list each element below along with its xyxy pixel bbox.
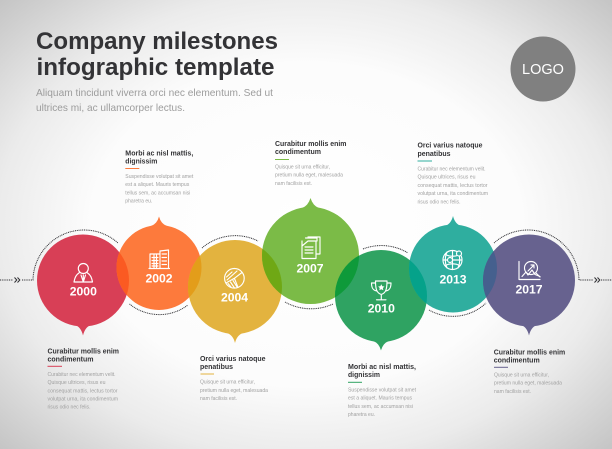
year 2017: 2017 bbox=[515, 282, 543, 296]
text block: 2000: Curabitur nec elementum velit. bbox=[48, 372, 116, 378]
text block: 2000: consequat mattis, lectus tortor bbox=[48, 388, 118, 394]
text block: 2007: pretium nulla eget, malesuada bbox=[275, 173, 343, 179]
year 2010: 2010 bbox=[368, 302, 395, 316]
subtitle: Aliquam tincidunt viverra orci nec elementum. Sed ut bbox=[36, 88, 273, 99]
text block: 2007: nam facilisis est. bbox=[275, 181, 312, 187]
text block: 2002 bbox=[125, 148, 194, 205]
milestone 2013 circle bbox=[409, 216, 497, 312]
text block: 2010: dignissim bbox=[348, 370, 380, 379]
icon: chart with magnifier bbox=[519, 262, 540, 280]
text block: 2002: Morbi ac nisl mattis, bbox=[125, 148, 193, 158]
title bbox=[36, 28, 278, 81]
text block: 2007: condimentum bbox=[275, 147, 321, 156]
text block: 2004: nam facilisis est. bbox=[200, 396, 237, 402]
text block: 2017: Curabitur mollis enim bbox=[494, 348, 566, 356]
logo: LOGO bbox=[522, 62, 564, 78]
icon: person bbox=[74, 264, 92, 282]
text block: 2002: Suspendisse volutpat sit amet bbox=[125, 174, 194, 180]
text block: 2010: pharetra eu. bbox=[348, 412, 375, 418]
text block: 2004: Orci varius natoque bbox=[200, 354, 266, 363]
text block: 2007 bbox=[275, 139, 347, 187]
milestone 2002 circle bbox=[116, 216, 202, 310]
text block: 2002: est a aliquet. Mauris tempus bbox=[125, 182, 190, 188]
text block: 2013: volutpat urna, ita condimentum bbox=[418, 191, 488, 197]
text block: 2017: Quisque sit urna efficitur, bbox=[494, 372, 549, 378]
text block: 2002: dignissim bbox=[125, 157, 158, 166]
text block: 2013: consequat mattis, lectus tortor bbox=[418, 183, 488, 189]
text block: 2000: condimentum bbox=[48, 355, 94, 364]
text block: 2017: condimentum bbox=[494, 356, 540, 365]
text block: 2017: pretium nulla eget, malesuada bbox=[494, 381, 562, 387]
text block: 2013: risus odio nec felis. bbox=[418, 199, 460, 205]
circle overlaps bbox=[116, 249, 497, 304]
text block: 2007: Curabitur mollis enim bbox=[275, 139, 347, 148]
text block: 2004 bbox=[200, 354, 268, 402]
milestone 2000 circle bbox=[37, 234, 129, 336]
text block: 2010 bbox=[348, 362, 417, 418]
year 2000: 2000 bbox=[70, 285, 97, 299]
text block: 2004: penatibus bbox=[200, 362, 233, 371]
year 2013: 2013 bbox=[439, 272, 467, 286]
text block: 2017 bbox=[494, 348, 566, 395]
text block: 2013: Curabitur nec elementum velit. bbox=[418, 166, 486, 172]
text block: 2002: tellus sem, ac accumsan nisi bbox=[125, 190, 190, 196]
year 2004: 2004 bbox=[221, 291, 248, 305]
logo bbox=[510, 36, 576, 102]
text block: 2004: pretium nulla eget, malesuada bbox=[200, 388, 268, 394]
year 2002: 2002 bbox=[145, 272, 173, 286]
icon: trophy bbox=[372, 281, 391, 300]
milestone 2017 circle bbox=[483, 234, 575, 336]
text block: 2000: risus odio nec felis. bbox=[48, 405, 90, 411]
text block: 2000: Quisque ultrices, risus eu bbox=[48, 380, 106, 386]
text block: 2000: Curabitur mollis enim bbox=[48, 346, 119, 356]
text block: 2010: Suspendisse volutpat sit amet bbox=[348, 388, 417, 394]
title: Company milestones bbox=[36, 28, 278, 55]
text block: 2000 bbox=[48, 346, 119, 411]
text block: 2010: est a aliquet. Mauris tempus bbox=[348, 396, 413, 402]
text block: 2017: nam facilisis est. bbox=[494, 389, 531, 395]
text block: 2013 bbox=[418, 141, 488, 205]
subtitle bbox=[36, 88, 273, 114]
icon: documents bbox=[302, 237, 320, 258]
text block: 2010: tellus sem, ac accumsan nisi bbox=[348, 404, 413, 410]
icon: globe bbox=[443, 250, 462, 270]
milestone 2007 circle bbox=[262, 198, 359, 304]
text block: 2004: Quisque sit urna efficitur, bbox=[200, 380, 255, 386]
milestone 2010 circle bbox=[335, 250, 427, 350]
text block: 2013: penatibus bbox=[418, 149, 450, 158]
text block: 2000: volutpat urna, ita condimentum bbox=[48, 396, 118, 402]
timeline dotted path bbox=[0, 230, 612, 316]
year 2007: 2007 bbox=[296, 261, 324, 275]
text block: 2007: Quisque sit urna efficitur, bbox=[275, 164, 330, 170]
milestone 2004 circle bbox=[188, 240, 282, 343]
text block: 2002: pharetra eu. bbox=[125, 199, 152, 205]
text block: 2013: Quisque ultrices, risus eu bbox=[418, 175, 476, 181]
text block: 2010: Morbi ac nisl mattis, bbox=[348, 362, 416, 371]
text block: 2013: Orci varius natoque bbox=[418, 141, 482, 150]
title: infographic template bbox=[36, 54, 274, 81]
icon: pie chart bbox=[225, 268, 244, 288]
subtitle: ultrices mi, ac ullamcorper lectus. bbox=[36, 103, 185, 114]
icon: buildings bbox=[149, 250, 170, 268]
